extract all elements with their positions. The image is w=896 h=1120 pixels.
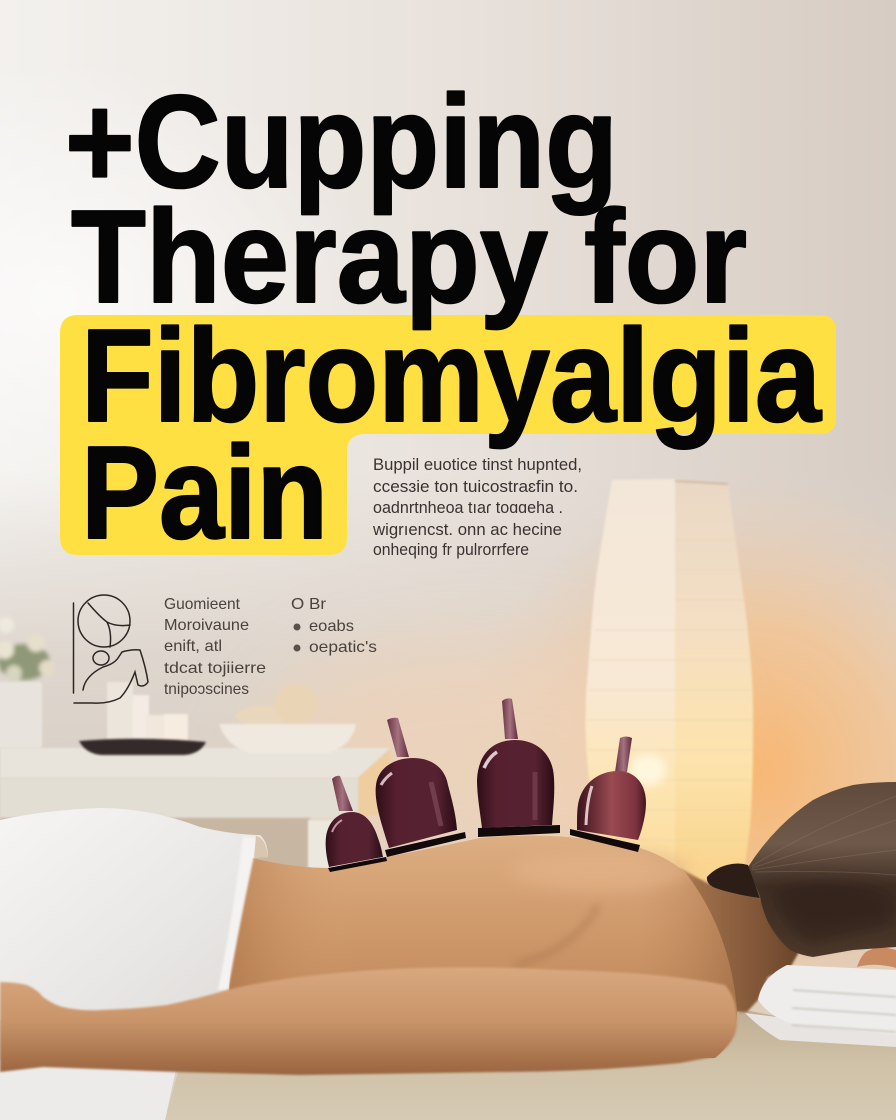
list text right column bbox=[291, 596, 377, 656]
white towel over hips bbox=[0, 808, 268, 1020]
list text left column: enift, atl bbox=[164, 638, 222, 655]
paper lamp bbox=[586, 479, 753, 880]
title: +Cupping bbox=[65, 68, 618, 215]
yellow title highlight bbox=[60, 315, 836, 555]
list text left column bbox=[164, 596, 266, 698]
arm bbox=[0, 967, 737, 1075]
list text right column: eoabs bbox=[309, 618, 354, 635]
list text left column: Moroivaune bbox=[164, 617, 249, 634]
intro text block: wigrıencst. onn ac hecine bbox=[372, 521, 562, 539]
title: Pain bbox=[81, 419, 328, 566]
list text left column: tdcat tojiierre bbox=[164, 660, 266, 677]
plant and pot bbox=[0, 617, 55, 748]
cupping cups bbox=[326, 698, 646, 872]
title: for bbox=[584, 183, 747, 330]
massage bed bbox=[165, 1010, 896, 1120]
cup 2 bbox=[376, 718, 466, 857]
list text left column: tnipoɔscines bbox=[164, 681, 249, 698]
hair bbox=[707, 782, 896, 957]
title: Therapy bbox=[71, 183, 548, 330]
cup 1 bbox=[326, 776, 387, 872]
title bbox=[65, 68, 822, 566]
folded head towel bbox=[745, 965, 896, 1047]
hair bun bbox=[707, 864, 760, 898]
candles on tray bbox=[79, 682, 206, 755]
back and torso bbox=[228, 836, 737, 1058]
list text right column: O Br bbox=[291, 596, 327, 613]
bowl with spheres bbox=[219, 684, 356, 753]
intro text block bbox=[372, 456, 582, 559]
intro text block: oadnrtnheoa tıaɾ toɑɑeha . bbox=[373, 499, 563, 517]
list text right column: oepatic's bbox=[309, 639, 377, 656]
intro text block: Buppil euotice tinst hupnted, bbox=[373, 456, 582, 474]
towel under arm bbox=[0, 1060, 178, 1120]
cup 4 bbox=[570, 736, 646, 852]
intro text block: ccesɜie ton tuicostraɛfin to. bbox=[373, 478, 578, 496]
icon: body outline bbox=[74, 595, 148, 703]
title: Fibromyalgia bbox=[81, 302, 822, 449]
intro text block: onheqing fr pulrorrfere bbox=[373, 541, 529, 559]
list text left column: Guomieent bbox=[164, 596, 241, 613]
side table bbox=[0, 748, 390, 870]
neck bbox=[680, 868, 800, 1012]
cup 3 bbox=[477, 698, 560, 837]
ear bbox=[857, 948, 896, 968]
